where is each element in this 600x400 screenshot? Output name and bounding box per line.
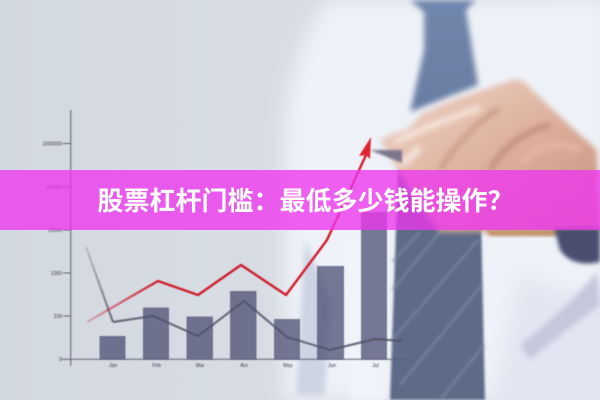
- chart axes and tick labels: Jan: [109, 363, 117, 369]
- chart axes and tick labels: [43, 110, 410, 369]
- chart axes and tick labels: 100: [54, 314, 62, 320]
- hand holding pen: [380, 80, 600, 264]
- shirt: [284, 0, 600, 400]
- chart axes and tick labels: 1000000: [43, 142, 62, 148]
- title: 股票杠杆门槛：最低多少钱能操作？: [98, 186, 514, 216]
- chart axes and tick labels: Jun: [328, 363, 336, 369]
- chart axes and tick labels: Jul: [372, 363, 379, 369]
- chart axes and tick labels: Mar: [196, 363, 205, 369]
- necktie: [390, 0, 485, 400]
- chart axes and tick labels: 0: [59, 357, 62, 363]
- chart axes and tick labels: 10000: [48, 228, 62, 234]
- grey trend line: [86, 247, 402, 350]
- chart axes and tick labels: Feb: [152, 363, 161, 369]
- chart axes and tick labels: Arv: [240, 363, 248, 369]
- banner: [0, 170, 600, 230]
- pen: [370, 150, 402, 163]
- chart axes and tick labels: May: [283, 363, 293, 369]
- shirt side shading: [296, 235, 600, 400]
- bar chart: [100, 212, 387, 360]
- chart axes and tick labels: 100000: [45, 185, 62, 191]
- red trend line with arrow: [87, 137, 371, 322]
- chart axes and tick labels: 1000: [51, 271, 62, 277]
